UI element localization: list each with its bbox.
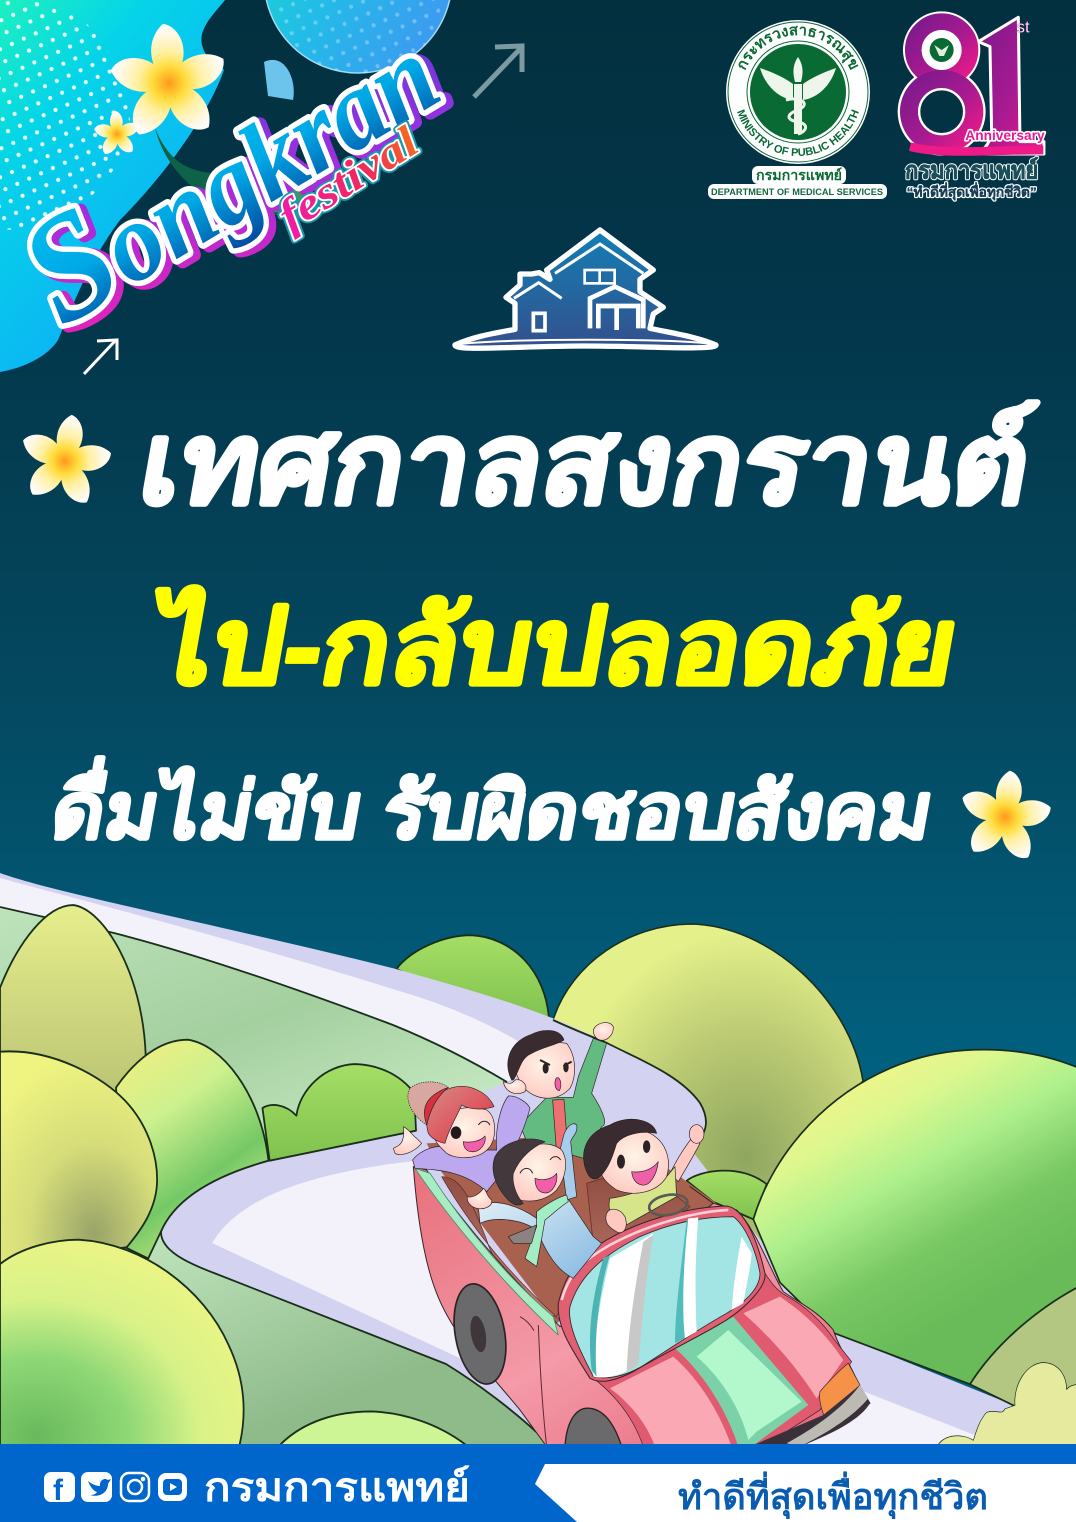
hills: right group — [687, 1050, 1076, 1447]
icon: small plumeria flower — [93, 111, 141, 157]
rear wheel — [453, 1283, 507, 1385]
hood — [593, 1273, 852, 1447]
numeral 8 — [909, 22, 1043, 151]
person: girl with green scarf — [467, 1124, 602, 1278]
Anniversary: Anniversary — [965, 127, 1045, 143]
logo: Ministry of Public Health seal — [726, 20, 870, 164]
slogan text: ทำดีที่สุดเพื่อทุกชีวิต — [678, 1471, 988, 1520]
bumper — [750, 1385, 870, 1447]
slogan: “ทำดีที่สุดเพื่อทุกชีวิต” — [907, 182, 1037, 201]
illustration: landscape with road — [0, 873, 1076, 1447]
icon: YouTube — [158, 1473, 187, 1501]
door trim — [415, 1168, 558, 1335]
car seats — [442, 1167, 690, 1320]
ground — [0, 900, 560, 1444]
logo: Songkran festival — [0, 0, 469, 361]
person: boy driver — [584, 1119, 704, 1233]
front wheel — [565, 1408, 622, 1447]
icon: caduceus emblem — [760, 57, 836, 134]
slogan: “ทำดีที่สุดเพื่อทุกชีวิต” — [907, 182, 1037, 201]
small seal inside 8 — [922, 30, 962, 70]
seal text: English ministry name: MINISTRY OF PUBLIC HEALTH — [737, 109, 859, 156]
icon: Facebook — [44, 1472, 75, 1507]
department name: กรมการแพทย์ — [204, 1465, 470, 1510]
person: woman with red hair — [393, 1082, 530, 1192]
icon: plumeria flower left of heading — [7, 404, 122, 517]
road edge lines — [0, 907, 706, 1445]
road — [0, 873, 1076, 1445]
seal text: Thai ministry name: กระทรวงสาธารณสุข — [738, 26, 858, 70]
heading: travel safely: ไป-กลับปลอดภัย — [135, 586, 967, 706]
label: department name, English: DEPARTMENT OF MEDICAL SERVICES — [711, 187, 883, 198]
numeral 1 — [977, 17, 1044, 154]
festival wordmark: festival — [269, 116, 428, 240]
door line and handle — [520, 1317, 547, 1447]
hills: left group — [0, 905, 468, 1446]
arrow: white — [84, 340, 117, 374]
hill: behind road centre — [396, 935, 549, 1022]
department wordmark: กรมการแพทย์ — [905, 156, 1038, 184]
festival wordmark: festival — [269, 116, 428, 240]
decoration: top-left water blob and ball — [0, 0, 454, 372]
car body — [413, 1167, 870, 1447]
logo: 81st anniversary — [905, 17, 1045, 201]
st: st — [1017, 18, 1030, 37]
heading: do not drink and drive: ดื่มไม่ขับ รับผิดชอบสังคม — [45, 757, 942, 855]
headlight — [820, 1363, 860, 1418]
Songkran wordmark: Songkran — [0, 0, 463, 356]
hill: large olive centre — [552, 923, 864, 1242]
icon: Instagram — [121, 1473, 149, 1501]
heading: do not drink and drive — [45, 757, 1061, 872]
heading text line 1: เทศกาลสงกรานต์ — [131, 401, 1041, 528]
Anniversary: Anniversary — [965, 127, 1045, 143]
person: man in green jacket — [503, 1023, 613, 1158]
department wordmark: กรมการแพทย์ — [905, 156, 1038, 184]
illustration: car with family — [393, 1023, 870, 1447]
label: department name, Thai: กรมการแพทย์ — [756, 167, 842, 183]
icon: Twitter — [81, 1472, 112, 1502]
slogan panel — [535, 1464, 1076, 1522]
footer bar — [0, 1444, 1076, 1522]
Songkran wordmark: Songkran — [0, 0, 463, 356]
icon: large plumeria flower — [107, 24, 230, 141]
heading: festival name — [7, 401, 1041, 528]
windshield frame — [558, 1206, 765, 1381]
Songkran wordmark: Songkran — [0, 0, 469, 359]
arrow: grey — [474, 46, 522, 97]
icon: Facebook: f — [53, 1474, 64, 1507]
windshield glass — [570, 1217, 760, 1378]
car interior — [427, 1137, 717, 1323]
icon: plumeria flower right of heading — [948, 762, 1061, 872]
icon: house on hill — [455, 230, 716, 348]
festival wordmark: festival — [269, 116, 428, 240]
road highlights — [0, 878, 1000, 1445]
